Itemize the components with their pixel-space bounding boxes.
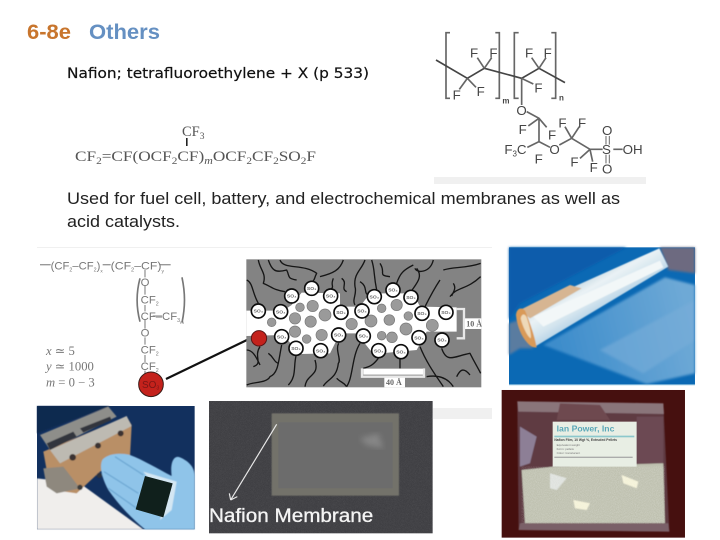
chemical structure: side chain with SO3 group: SO: [142, 380, 156, 391]
chemical structure: Nafion polymer: F: [570, 155, 578, 170]
chemical structure: side chain with SO3 group: y: [161, 269, 165, 274]
chemical structure: side chain with SO3 group: –CF: [72, 260, 94, 272]
chemical structure: side chain with SO3 group: x ≃ 5: [45, 344, 75, 358]
sulfonate labels: SO₃: [277, 334, 287, 340]
product label: Color: translucent: [557, 451, 580, 455]
sulfonate labels: SO₃: [334, 333, 344, 339]
text: uses of Nafion: Used for fuel cell, battery, and electrochemical membranes as well as: [67, 190, 620, 208]
sulfonate groups: [251, 281, 453, 359]
chemical structure: Nafion polymer: F: [535, 151, 543, 166]
sulfonate labels: SO₃: [336, 310, 346, 316]
diagram: ion channel cluster: [246, 259, 482, 387]
sulfonate labels: SO₃: [370, 294, 380, 300]
chemical formula: monomer: CF: [75, 149, 93, 165]
sulfonate labels: SO₃: [326, 294, 336, 300]
chemical structure: Nafion polymer: 3: [512, 150, 517, 159]
chemical formula: monomer: 2: [96, 157, 102, 167]
photo: bag of Nafion pellets: [502, 390, 685, 538]
chemical structure: side chain with SO3 group: m: [180, 320, 184, 325]
chemical structure: side chain with SO3 group: 2: [69, 267, 72, 273]
chemical structure: side chain with SO3 group: CF–CF: [141, 311, 177, 323]
chemical structure: side chain with SO3 group: CF: [141, 361, 156, 373]
sulfonate labels: SO₃: [276, 309, 286, 315]
sulfonate labels: SO₃: [291, 346, 301, 352]
blue glove: [101, 454, 195, 529]
sulfonate labels: SO₃: [406, 295, 416, 301]
product label: Form: pellets: [557, 447, 574, 451]
chemical structure: Nafion polymer: F: [489, 45, 497, 60]
chemical formula: monomer: 2: [301, 157, 307, 167]
chemical structure: Nafion polymer: F: [504, 142, 512, 157]
chemical formula: monomer: m: [204, 156, 213, 167]
chemical structure: side chain with SO3 group: O: [141, 328, 150, 340]
chemical formula: monomer: [75, 124, 316, 167]
sulfonate labels: SO₃: [357, 309, 367, 315]
black membrane sample: [136, 476, 173, 517]
chemical structure: Nafion polymer: F: [477, 84, 485, 99]
sulfonate labels: SO₃: [254, 309, 264, 315]
product label: [553, 422, 637, 467]
chemical structure: Nafion polymer: F: [470, 45, 478, 60]
diagram: ion channel cluster: 40 Å: [386, 378, 402, 387]
sulfonate labels: SO₃: [388, 288, 398, 294]
chemical structure: side chain with SO3 group: 2: [156, 301, 159, 307]
chemical structure: Nafion polymer: O: [516, 103, 527, 118]
sulfonate labels: SO₃: [414, 335, 424, 341]
chemical structure: side chain with SO3 group: 3: [156, 386, 159, 392]
chemical structure: Nafion polymer: F: [558, 115, 566, 130]
title: [27, 21, 160, 44]
scale bar: 40 A: [362, 368, 424, 377]
chemical formula: monomer: SO: [279, 149, 301, 165]
chemical structure: side chain with SO3 group: y ≃ 1000: [44, 360, 94, 374]
chemical structure: Nafion polymer: F: [453, 87, 461, 102]
product label: Ian Power, Inc: [557, 424, 615, 434]
membrane outer edge: [272, 413, 399, 496]
white water channel: [246, 293, 457, 354]
chemical structure: side chain with SO3 group: O: [141, 277, 150, 289]
chemical structure: side chain with SO3 group: 2: [156, 368, 159, 374]
chemical formula: monomer: CF: [182, 124, 200, 140]
title: Others: [89, 21, 160, 44]
sulfonate labels: SO₃: [316, 348, 326, 354]
chemical structure: Nafion polymer: O: [602, 161, 612, 176]
chemical structure: side chain with SO3 group: 2: [94, 267, 97, 273]
chemical structure: Nafion polymer: [436, 33, 643, 176]
text: uses of Nafion: acid catalysts.: [67, 213, 180, 231]
chemical structure: side chain with SO3 group: 3: [177, 318, 180, 324]
chemical structure: Nafion polymer: F: [578, 115, 586, 130]
text: uses of Nafion: [67, 190, 620, 231]
chemical formula: monomer: 3: [200, 132, 205, 142]
chemical formula: monomer: =CF(OCF: [102, 149, 172, 165]
text: Nafion definition: Nafion; tetrafluoroethylene + X (p 533): [67, 66, 369, 82]
chemical structure: Nafion polymer: O: [602, 123, 612, 138]
hydrated water molecules: [267, 299, 438, 343]
chemical structure: Nafion polymer: F: [544, 45, 552, 60]
chemical structure: Nafion polymer: F: [534, 80, 542, 95]
sulfonate labels: SO₃: [437, 338, 447, 344]
arrow to membrane: [229, 424, 277, 500]
sulfonate labels: SO₃: [396, 349, 406, 355]
decorative faint bars: [37, 177, 646, 419]
chemical structure: side chain with SO3 group: CF: [141, 294, 156, 306]
product label: Nafion Film, 10 Wgt %, Extruded Pellets: [554, 438, 617, 442]
chemical structure: Nafion polymer: n: [559, 94, 564, 103]
chemical structure: Nafion polymer: C: [517, 142, 527, 157]
sulfonate labels: SO₃: [287, 294, 297, 300]
chemical structure: Nafion polymer: F: [519, 122, 527, 137]
chemical formula: monomer: 2: [273, 157, 279, 167]
sulfonate labels: [254, 286, 451, 355]
chemical formula: monomer: CF): [177, 149, 204, 165]
chemical structure: Nafion polymer: F: [590, 160, 598, 175]
chemical structure: Nafion polymer: F: [548, 127, 556, 142]
chemical structure: side chain with SO3 group: (CF: [51, 260, 70, 272]
copper plate: [43, 417, 132, 493]
chemical structure: side chain with SO3 group: m = 0 − 3: [46, 375, 95, 389]
membrane center: [278, 422, 393, 488]
photo: Nafion film roll: [509, 247, 695, 385]
chemical structure: Nafion polymer: OH: [623, 142, 643, 157]
diagram: ion channel cluster: 10 Å: [466, 320, 482, 329]
photo: gloved hand holding membrane: [37, 406, 195, 529]
sulfonate labels: SO₃: [417, 311, 427, 317]
sulfonate labels: SO₃: [441, 310, 451, 316]
chemical structure: side chain with SO3 group: [40, 260, 184, 397]
photo caption: Nafion Membrane: [209, 505, 373, 527]
chemical structure: Nafion polymer: m: [502, 96, 509, 105]
chemical structure: side chain with SO3 group: –CF): [134, 260, 162, 272]
chemical structure: Nafion polymer: O: [549, 142, 560, 157]
chemical formula: monomer: 2: [172, 157, 178, 167]
glare on membrane: [360, 433, 383, 448]
chemical structure: side chain with SO3 group: CF: [141, 344, 156, 356]
arrow: SO3 group to ion channel diagram: [166, 339, 249, 379]
chemical formula: monomer: 2: [246, 157, 252, 167]
chemical formula: monomer: CF: [252, 149, 273, 165]
chemical structure: side chain with SO3 group: (CF: [111, 260, 130, 272]
product label: Equivalent weight: [557, 443, 580, 447]
chemical structure: side chain with SO3 group: 2: [156, 351, 159, 357]
chemical structure: side chain with SO3 group: 2: [131, 267, 134, 273]
scale bar: 10 A: [457, 309, 464, 338]
chemical structure: side chain with SO3 group: x: [100, 269, 103, 274]
photo: Nafion membrane sheet: [209, 401, 433, 533]
red highlighted sulfonate: [251, 331, 267, 346]
polymer chains: [247, 260, 481, 387]
title: 6-8e: [27, 21, 71, 44]
sulfonate labels: SO₃: [359, 334, 369, 340]
sulfonate labels: SO₃: [307, 286, 317, 292]
chemical formula: monomer: F: [306, 149, 316, 165]
sulfonate labels: SO₃: [374, 348, 384, 354]
chemical structure: side chain with SO3 group: ): [97, 260, 101, 272]
chemical structure: Nafion polymer: F: [525, 45, 533, 60]
chemical formula: monomer: OCF: [213, 149, 246, 165]
chemical structure: Nafion polymer: S: [602, 142, 611, 157]
